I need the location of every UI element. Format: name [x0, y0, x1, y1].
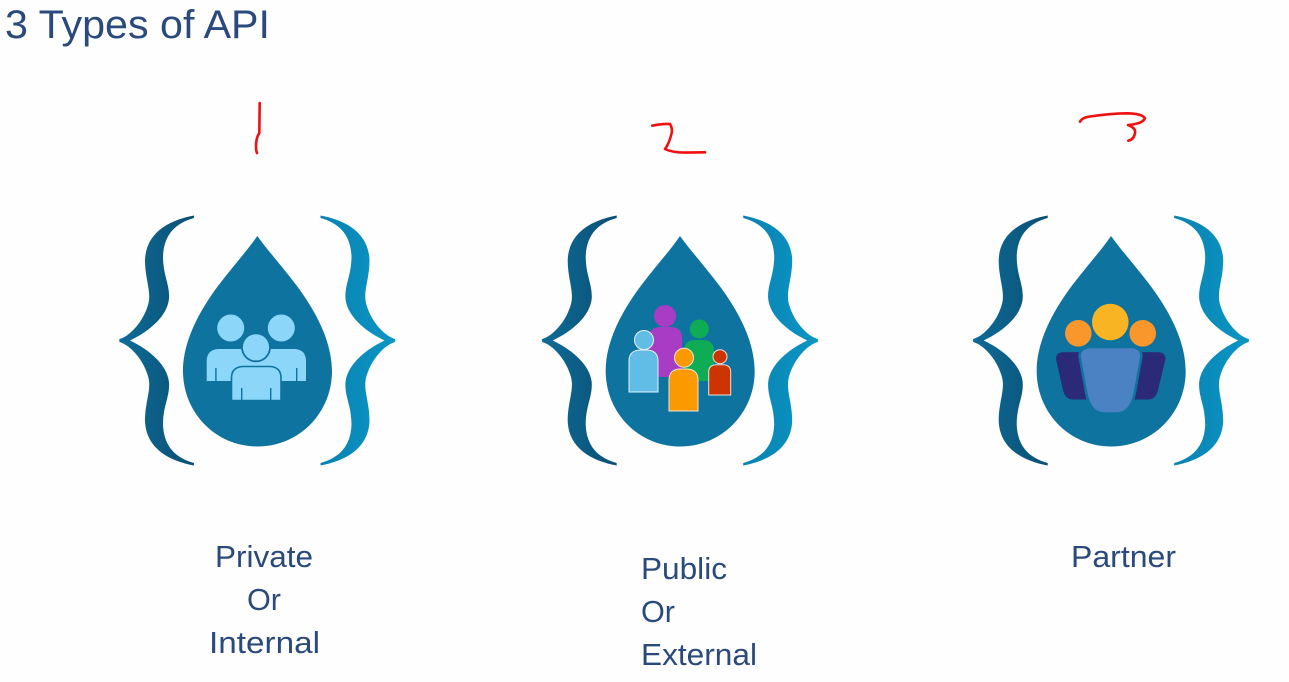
- icon: right brace: [1174, 216, 1249, 466]
- panel: public API: [542, 216, 818, 672]
- label: private or internal: Private: [215, 539, 313, 574]
- icon: people group: [207, 314, 306, 400]
- icon: colourful crowd: [629, 305, 731, 411]
- icon: partner group: [1056, 304, 1166, 414]
- handwritten number 1: [256, 103, 260, 153]
- icon: water drop: [606, 236, 755, 446]
- figure: orange person: [669, 348, 698, 411]
- icon: water drop: [183, 236, 332, 446]
- panel: partner API: [973, 216, 1249, 574]
- label: partner: Partner: [1071, 539, 1176, 574]
- figure: red person: [709, 350, 731, 395]
- label: private or internal: Internal: [209, 625, 320, 660]
- icon: left brace: [542, 216, 617, 466]
- label: public or external: Public: [641, 551, 727, 586]
- panel: private API: [119, 216, 395, 660]
- label: private or internal: [209, 539, 320, 660]
- label: private or internal: Or: [247, 582, 281, 617]
- icon: right brace: [320, 216, 395, 466]
- label: public or external: External: [641, 637, 757, 672]
- icon: left brace: [119, 216, 194, 466]
- icon: right brace: [743, 216, 818, 466]
- icon: water drop: [1037, 236, 1186, 446]
- figure: blue person: [629, 330, 658, 392]
- handwritten number 3: [1080, 113, 1145, 141]
- label: public or external: [641, 551, 757, 672]
- title: 3 Types of API: [5, 3, 270, 47]
- icon: left brace: [973, 216, 1048, 466]
- label: public or external: Or: [641, 594, 675, 629]
- handwritten number 2: [652, 124, 705, 153]
